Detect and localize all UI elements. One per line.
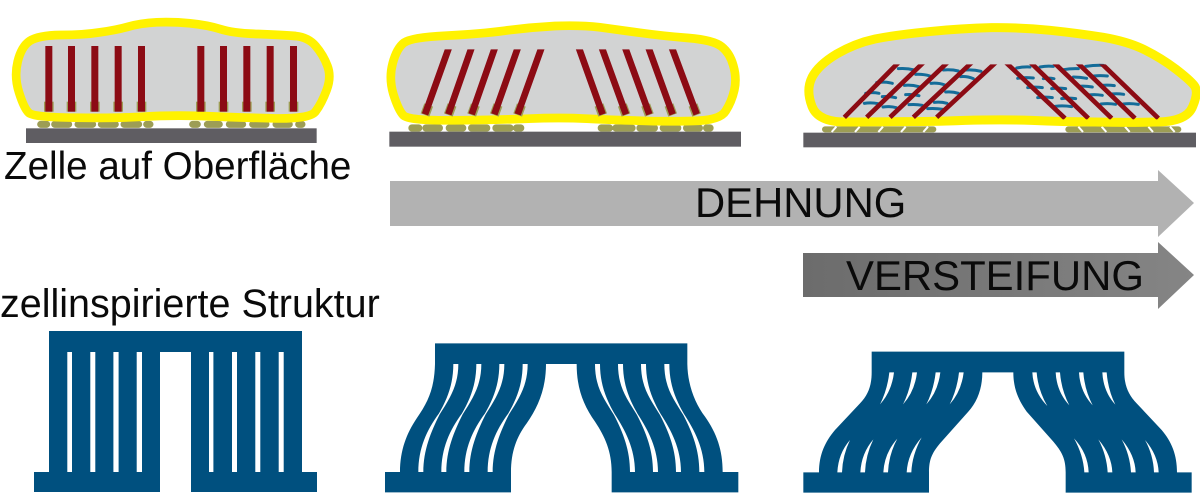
left slits	[418, 364, 528, 472]
arrow: Dehnung	[390, 170, 1194, 237]
actin rods	[425, 43, 697, 114]
panel: cell stretched	[389, 26, 741, 147]
surface bar	[803, 133, 1196, 147]
upper right slits	[1032, 372, 1115, 406]
panel: cell on surface, unstretched	[16, 22, 329, 143]
beam, angled legs and feet	[803, 352, 1192, 493]
rod bases	[425, 105, 697, 115]
cell body with yellow membrane	[809, 28, 1196, 122]
actin rods	[45, 46, 297, 112]
surface bar	[26, 128, 317, 143]
panel: structure, stretched	[385, 343, 738, 492]
beam, curved legs and feet	[385, 343, 738, 492]
lower right slits	[1074, 438, 1159, 472]
upper left slits	[880, 372, 964, 404]
cell body with yellow membrane	[391, 26, 735, 121]
panel: structure, unstretched	[34, 331, 317, 492]
focal adhesions	[412, 117, 710, 139]
cross-linking fibres	[864, 65, 1138, 109]
label: cell-inspired structure: zellinspirierte Struktur	[0, 282, 380, 326]
cell body with yellow membrane	[16, 22, 329, 118]
focal adhesions	[825, 120, 1178, 138]
top beam and legs	[34, 331, 317, 492]
focal adhesions	[41, 114, 302, 135]
actin rods	[844, 61, 1158, 118]
arrow label: Dehnung: DEHNUNG	[695, 179, 906, 226]
arrow: Versteifung	[803, 242, 1194, 309]
adhesion gaps	[832, 127, 1175, 132]
right slits	[595, 364, 704, 472]
arrow label: Versteifung: VERSTEIFUNG	[846, 252, 1144, 299]
slits	[67, 352, 284, 472]
panel: structure, stretched and stiffened	[803, 352, 1192, 493]
lower left slits	[837, 437, 922, 472]
label: cell on surface: Zelle auf Oberfläche	[4, 145, 351, 188]
rod bases	[44, 102, 298, 112]
surface bar	[389, 132, 741, 147]
panel: cell stretched and stiffened	[803, 28, 1196, 147]
